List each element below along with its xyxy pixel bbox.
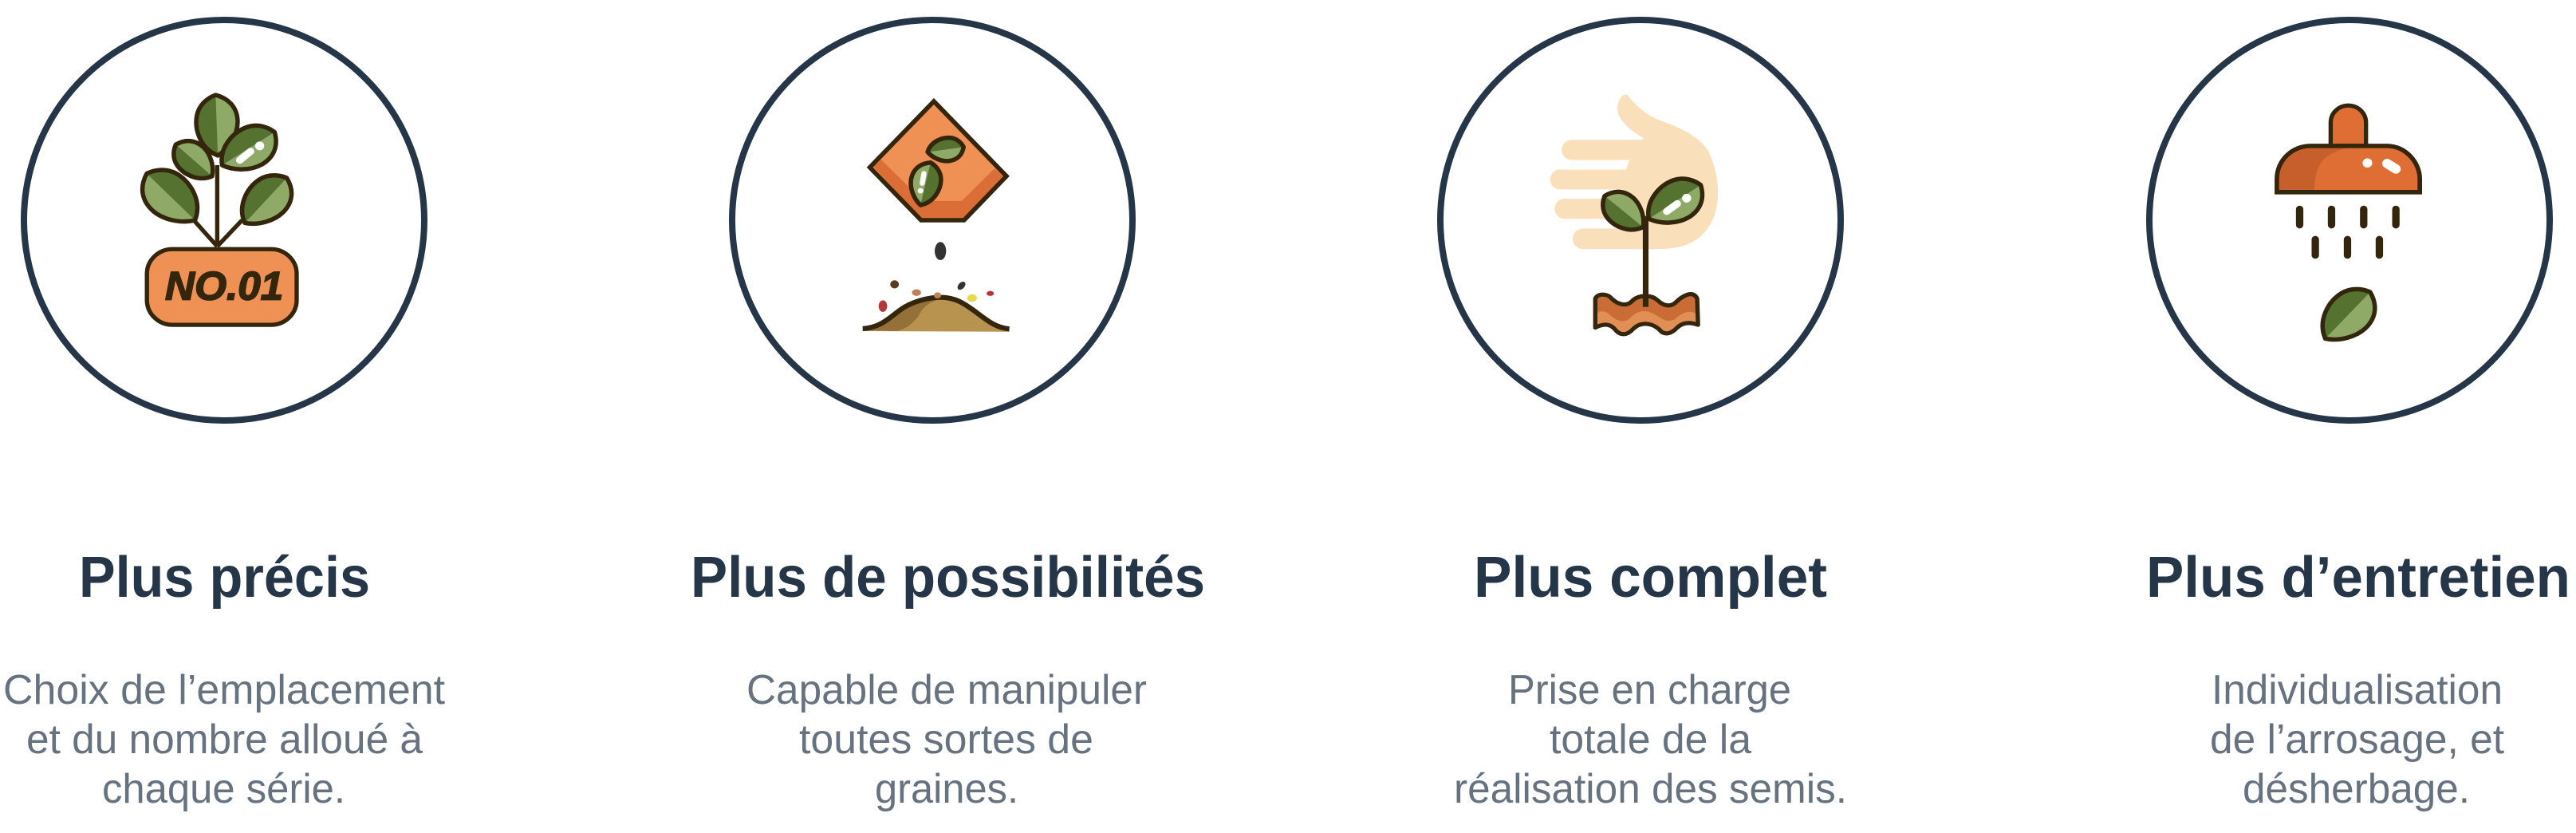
description 3 xyxy=(1454,667,1847,812)
heading 4: Plus d’entretien xyxy=(2146,546,2570,610)
icon: seed packet and soil xyxy=(863,101,1010,332)
icon: hand and seedling xyxy=(1550,94,1718,334)
heading 3: Plus complet xyxy=(1474,546,1827,610)
circle frame 4 xyxy=(2149,20,2550,420)
heading 1: Plus précis xyxy=(79,546,370,610)
description 4: de l’arrosage, et xyxy=(2210,717,2505,763)
description 4: désherbage. xyxy=(2243,766,2470,812)
icon: watering head and leaf xyxy=(2277,105,2420,353)
description 3: Prise en charge xyxy=(1508,667,1791,713)
description 4 xyxy=(2210,667,2505,812)
panel: plus de possibilités xyxy=(691,20,1205,812)
panel: plus d'entretien xyxy=(2146,20,2570,812)
circle frame 3 xyxy=(1440,20,1841,420)
description 1: chaque série. xyxy=(102,766,345,812)
icon: plant with NO.01 label: NO.01 xyxy=(165,263,283,308)
panel: plus complet xyxy=(1440,20,1847,812)
description 3: réalisation des semis. xyxy=(1454,766,1847,812)
description 2: Capable de manipuler xyxy=(746,667,1147,713)
description 4: Individualisation xyxy=(2212,667,2503,713)
description 3: totale de la xyxy=(1550,717,1751,763)
panel: plus précis xyxy=(3,20,446,812)
circle frame 2 xyxy=(732,20,1132,420)
description 2 xyxy=(746,667,1147,812)
description 1: et du nombre alloué à xyxy=(26,717,423,763)
circle frame 1 xyxy=(24,20,424,420)
description 1 xyxy=(3,667,446,812)
icon: plant with NO.01 label xyxy=(131,94,302,325)
description 2: toutes sortes de xyxy=(799,717,1093,763)
heading 2: Plus de possibilités xyxy=(691,546,1205,610)
description 2: graines. xyxy=(875,766,1018,812)
description 1: Choix de l’emplacement xyxy=(3,667,446,713)
